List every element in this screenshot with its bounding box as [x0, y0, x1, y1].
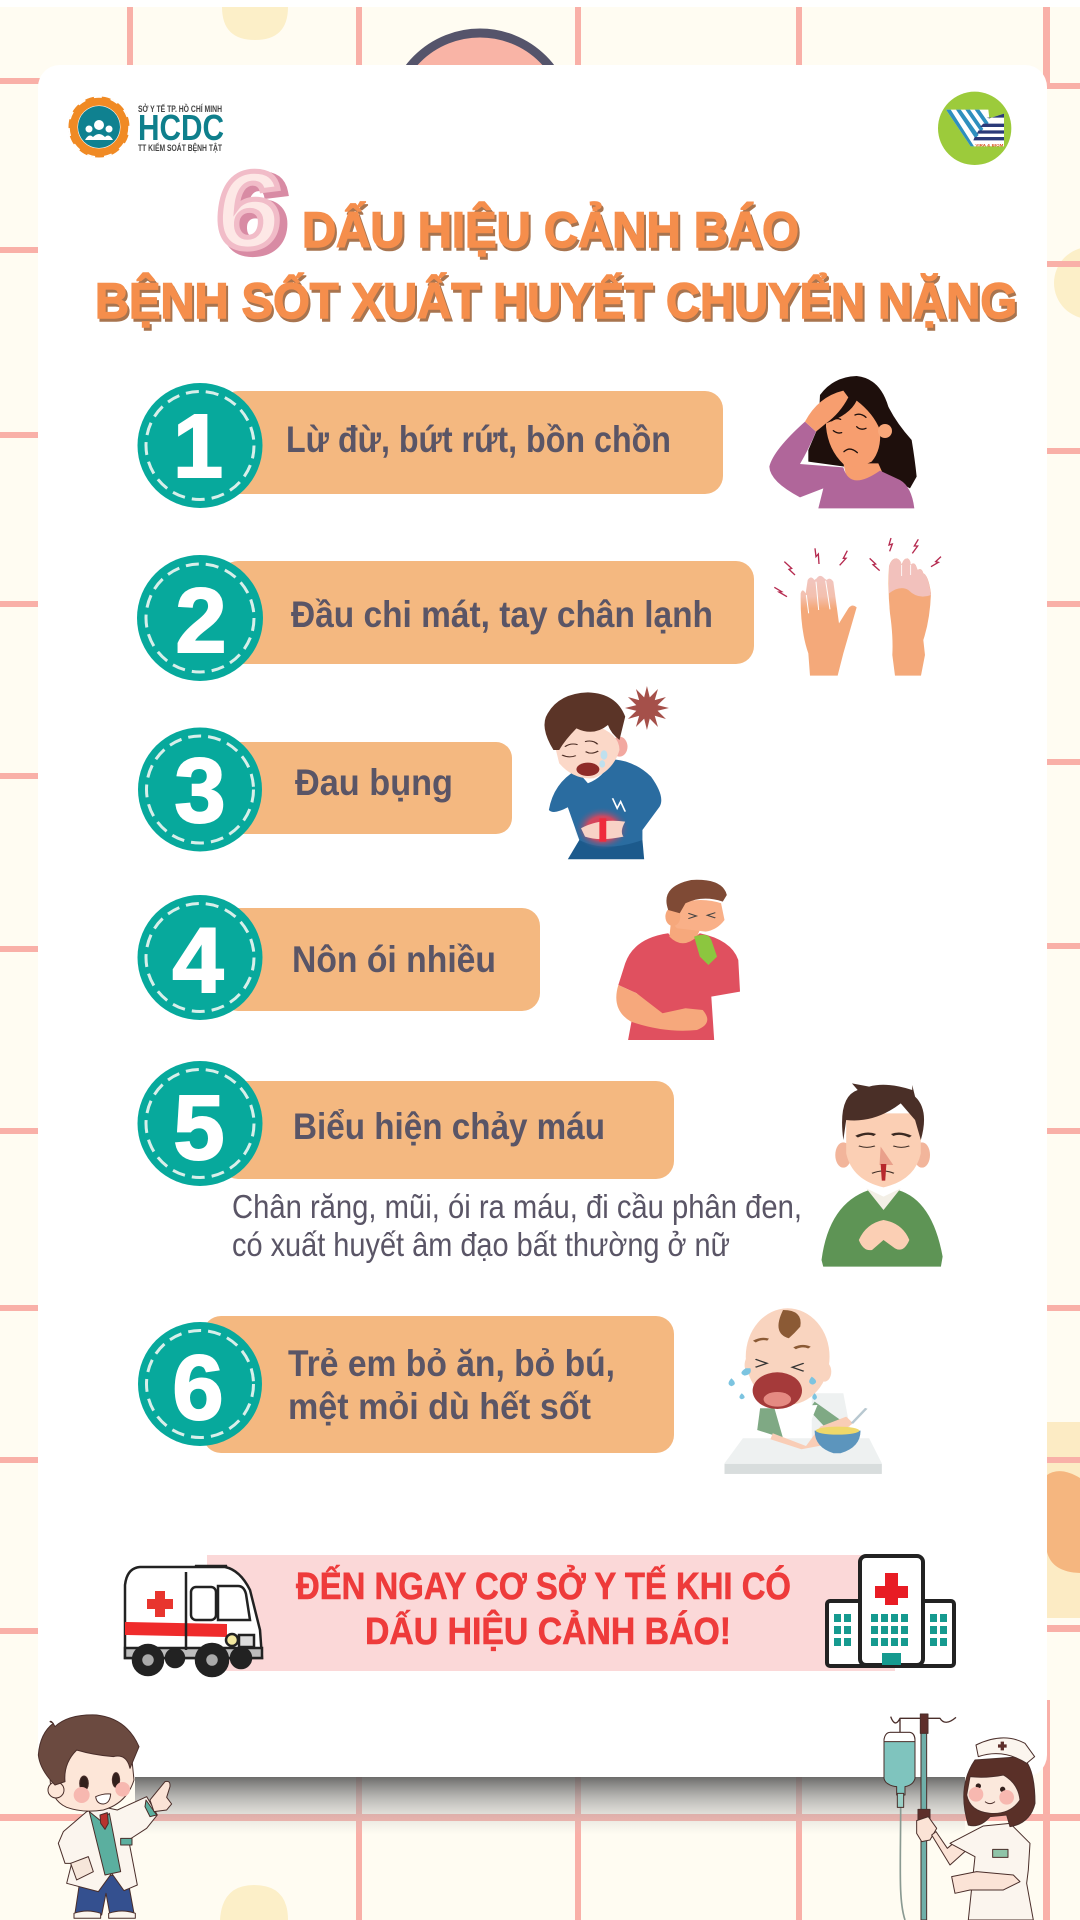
item 2 text: Đầu chi mát, tay chân lạnh — [291, 594, 713, 635]
item 5 bar — [220, 1081, 674, 1179]
item 6 text — [288, 1343, 615, 1427]
item 3 badge — [138, 728, 262, 852]
icon: cold hands and feet — [774, 538, 941, 676]
item 5 detail — [232, 1188, 802, 1263]
title number 6: 6 — [217, 153, 294, 276]
title line 2: BỆNH SỐT XUẤT HUYẾT CHUYỂN NẶNG — [97, 275, 1019, 332]
item 5 heading: Biểu hiện chảy máu — [293, 1106, 605, 1147]
item 6 badge: 6 — [172, 1337, 224, 1439]
logo: right green badge: VIRA & BIOM — [975, 143, 1003, 147]
item 2 — [137, 555, 754, 681]
item 6 — [138, 1316, 674, 1453]
item 5 badge: 5 — [173, 1077, 225, 1179]
banner text: DẤU HIỆU CẢNH BÁO! — [365, 1609, 731, 1653]
item 6 text: mệt mỏi dù hết sốt — [288, 1386, 591, 1427]
logo: right green badge — [938, 92, 1011, 165]
logo: HCDC — [69, 97, 224, 157]
item 4 badge: 4 — [172, 910, 224, 1012]
item 4 badge — [138, 895, 262, 1020]
icon: ambulance — [125, 1566, 262, 1676]
title number 6: 6 — [211, 149, 288, 272]
character: doctor — [38, 1715, 172, 1918]
item 5 detail: có xuất huyết âm đạo bất thường ở nữ — [232, 1226, 730, 1263]
item 4 text: Nôn ói nhiều — [292, 939, 496, 980]
icon: woman with headache — [769, 376, 917, 508]
item 2 bar — [220, 561, 754, 664]
icon: man with nosebleed — [822, 1083, 943, 1267]
item 4 bar — [220, 908, 540, 1011]
item 2 badge — [137, 555, 263, 681]
character: nurse and IV stand — [884, 1714, 1035, 1920]
banner text: ĐẾN NGAY CƠ SỞ Y TẾ KHI CÓ — [296, 1564, 791, 1608]
item 2 badge: 2 — [175, 570, 227, 672]
icon: hospital — [827, 1556, 954, 1666]
item 6 badge — [138, 1322, 262, 1446]
icon: boy with stomach pain — [544, 686, 669, 859]
item 3 badge: 3 — [174, 740, 226, 842]
item 1 — [138, 383, 723, 508]
logo: HCDC: HCDC — [138, 107, 224, 148]
item 5 — [138, 1061, 802, 1263]
item 1 bar — [220, 391, 723, 494]
item 3 text: Đau bụng — [295, 762, 453, 803]
icon: crying baby — [725, 1308, 882, 1474]
item 6 text: Trẻ em bỏ ăn, bỏ bú, — [288, 1343, 615, 1384]
logo: HCDC: SỞ Y TẾ TP. HỒ CHÍ MINH — [138, 103, 222, 114]
item 1 text: Lừ đừ, bứt rứt, bồn chồn — [286, 419, 671, 460]
item 5 detail: Chân răng, mũi, ói ra máu, đi cầu phân đen, — [232, 1188, 802, 1225]
item 3 bar — [220, 742, 512, 834]
logo: HCDC: TT KIỂM SOÁT BỆNH TẬT — [138, 142, 222, 153]
card shadow — [135, 1775, 965, 1835]
item 3 — [138, 728, 512, 852]
banner text — [296, 1564, 791, 1653]
item 4 — [138, 895, 540, 1020]
item 5 badge — [138, 1061, 262, 1186]
icon: man vomiting — [616, 880, 740, 1040]
title line 2: BỆNH SỐT XUẤT HUYẾT CHUYỂN NẶNG — [95, 272, 1017, 329]
call to action banner — [207, 1555, 895, 1671]
item 1 badge: 1 — [173, 397, 223, 497]
title line 1: DẤU HIỆU CẢNH BÁO — [304, 205, 801, 261]
item 1 badge — [138, 383, 262, 508]
item 6 bar — [203, 1316, 674, 1453]
title line 1: DẤU HIỆU CẢNH BÁO — [302, 202, 799, 258]
